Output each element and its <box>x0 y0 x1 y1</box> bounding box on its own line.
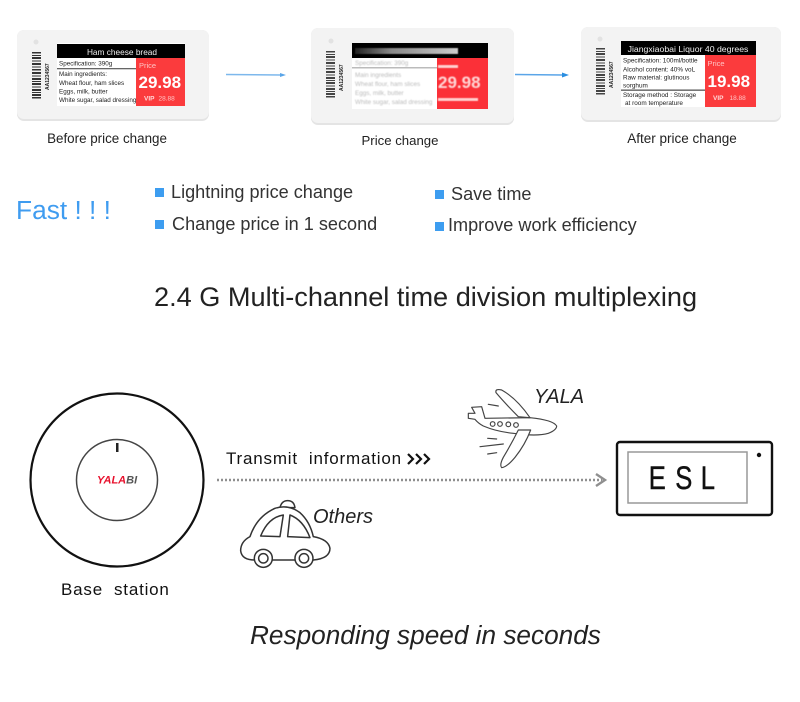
label screen: 29.98 <box>138 73 181 92</box>
dotted arrow to ESL <box>217 474 605 486</box>
label screen, mid refresh <box>352 43 488 109</box>
label screen: Price <box>139 61 156 70</box>
label screen <box>621 41 756 107</box>
label screen: Specification: 390g <box>59 60 113 68</box>
label: base station: Base station <box>61 580 170 599</box>
label screen: Specification: 100ml/bottle <box>623 58 698 64</box>
label screen: Main ingredients: <box>59 71 107 78</box>
heading: Fast: Fast ! ! ! <box>16 195 111 225</box>
caption: after price change: After price change <box>627 131 737 146</box>
barcode <box>326 51 335 98</box>
label screen: Price <box>708 59 725 68</box>
label screen: Jiangxiaobai Liquor 40 degrees <box>628 44 749 54</box>
ESL card: price change: AA1234567 <box>339 64 345 91</box>
ESL card: after price change <box>581 27 781 122</box>
arrow: first transition <box>226 73 286 77</box>
bullet: change price in 1 second: Change price in 1 second <box>172 214 377 234</box>
arrow: second transition <box>515 72 569 78</box>
label screen: Ham cheese bread <box>87 47 157 57</box>
label screen: White sugar, salad dressing <box>59 97 137 104</box>
bullet: save time: Save time <box>451 184 531 204</box>
icon: car <box>241 501 330 567</box>
label screen: Raw material: glutinous <box>623 74 689 82</box>
label screen: Alcohol content: 40% voL <box>623 66 696 74</box>
label screen: sorghum <box>623 82 648 90</box>
ESL card: before price change <box>17 30 209 121</box>
ESL device: ESL <box>649 461 715 497</box>
ESL card: price change <box>311 28 514 125</box>
caption: before price change: Before price change <box>47 131 167 146</box>
base station device <box>30 394 204 566</box>
caption: price change: Price change <box>362 133 438 148</box>
label screen, mid refresh: White sugar, salad dressing <box>355 99 433 106</box>
barcode <box>32 52 41 98</box>
label screen: 19.98 <box>708 72 750 91</box>
label screen: 28.88 <box>158 96 175 102</box>
label screen: VIP <box>713 95 724 102</box>
label screen: at room temperature <box>625 100 683 107</box>
label screen, mid refresh: 29.98 <box>438 73 481 92</box>
icon: airplane <box>468 390 557 468</box>
ESL card: after price change: AA1234567 <box>609 61 615 88</box>
label screen <box>57 43 185 106</box>
label screen, mid refresh: Specification: 390g <box>355 60 409 67</box>
label screen, mid refresh: Main ingredients <box>355 72 401 79</box>
label screen: VIP <box>144 96 155 102</box>
label screen, mid refresh: Eggs, milk, butter <box>355 90 404 97</box>
label: transmit information: Transmit information <box>226 449 402 468</box>
barcode <box>596 48 605 94</box>
ESL device <box>617 442 772 515</box>
label screen: Eggs, milk, butter <box>59 88 108 96</box>
logo: YALABI: YALABI <box>97 474 138 486</box>
label screen: Storage method : Storage <box>623 92 697 99</box>
heading: multiplexing: 2.4 G Multi-channel time division multiplexing <box>154 281 697 312</box>
ESL card: before price change: AA1234567 <box>45 63 51 90</box>
label screen, mid refresh: Wheat flour, ham slices <box>355 81 420 88</box>
bullet: improve work efficiency: Improve work efficiency <box>448 215 638 235</box>
caption: responding speed: Responding speed in seconds <box>250 620 601 650</box>
label: YALA: YALA <box>534 386 584 408</box>
label screen: Wheat flour, ham slices <box>59 80 124 87</box>
bullet: lightning price change: Lightning price change <box>171 182 353 202</box>
label screen: 18.88 <box>730 95 746 102</box>
label: others: Others <box>313 506 373 528</box>
